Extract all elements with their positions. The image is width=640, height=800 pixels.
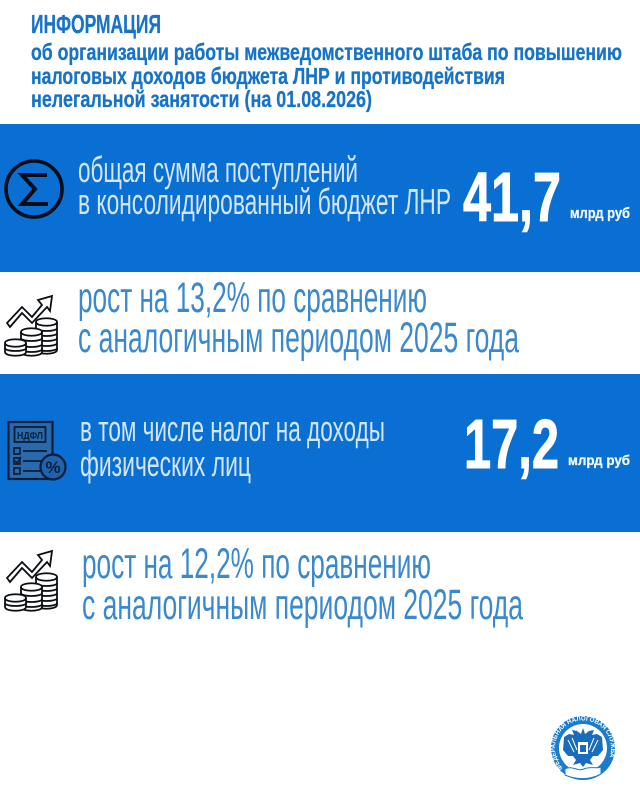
title: нелегальной занятости (на 01.08.2026) [31,86,372,112]
growth text 12,2% [82,540,523,629]
tax unit: млрд руб [568,452,630,468]
growth text 13,2% [78,274,519,362]
icon: tax form with percent [8,422,66,480]
title: ИНФОРМАЦИЯ [31,9,161,39]
icon: coins and growth arrow [5,296,57,356]
icon: coins and growth arrow [5,551,57,611]
revenue description [78,149,451,222]
tax value: 17,2 [464,405,559,483]
title [31,9,622,112]
icon: sigma [6,161,62,217]
tax description [80,408,385,484]
panel: total budget revenue [0,124,640,272]
title: налоговых доходов бюджета ЛНР и противодействия [31,63,505,89]
growth text 13,2%: рост на 13,2% по сравнению [78,274,427,322]
icon: tax form with percent: % [45,458,61,477]
logo: federal tax service emblem: ФЕДЕРАЛЬНАЯ НАЛОГОВАЯ СЛУЖБА [551,716,615,770]
tax description: физических лиц [80,443,251,484]
panel: personal income tax [0,374,640,532]
revenue unit: млрд руб [570,205,630,222]
revenue description: общая сумма поступлений [78,149,358,190]
icon: tax form with percent: НДФЛ [17,431,43,442]
tax description: в том числе налог на доходы [80,408,385,449]
revenue value: 41,7 [463,158,561,236]
growth text 12,2%: рост на 12,2% по сравнению [82,540,431,588]
